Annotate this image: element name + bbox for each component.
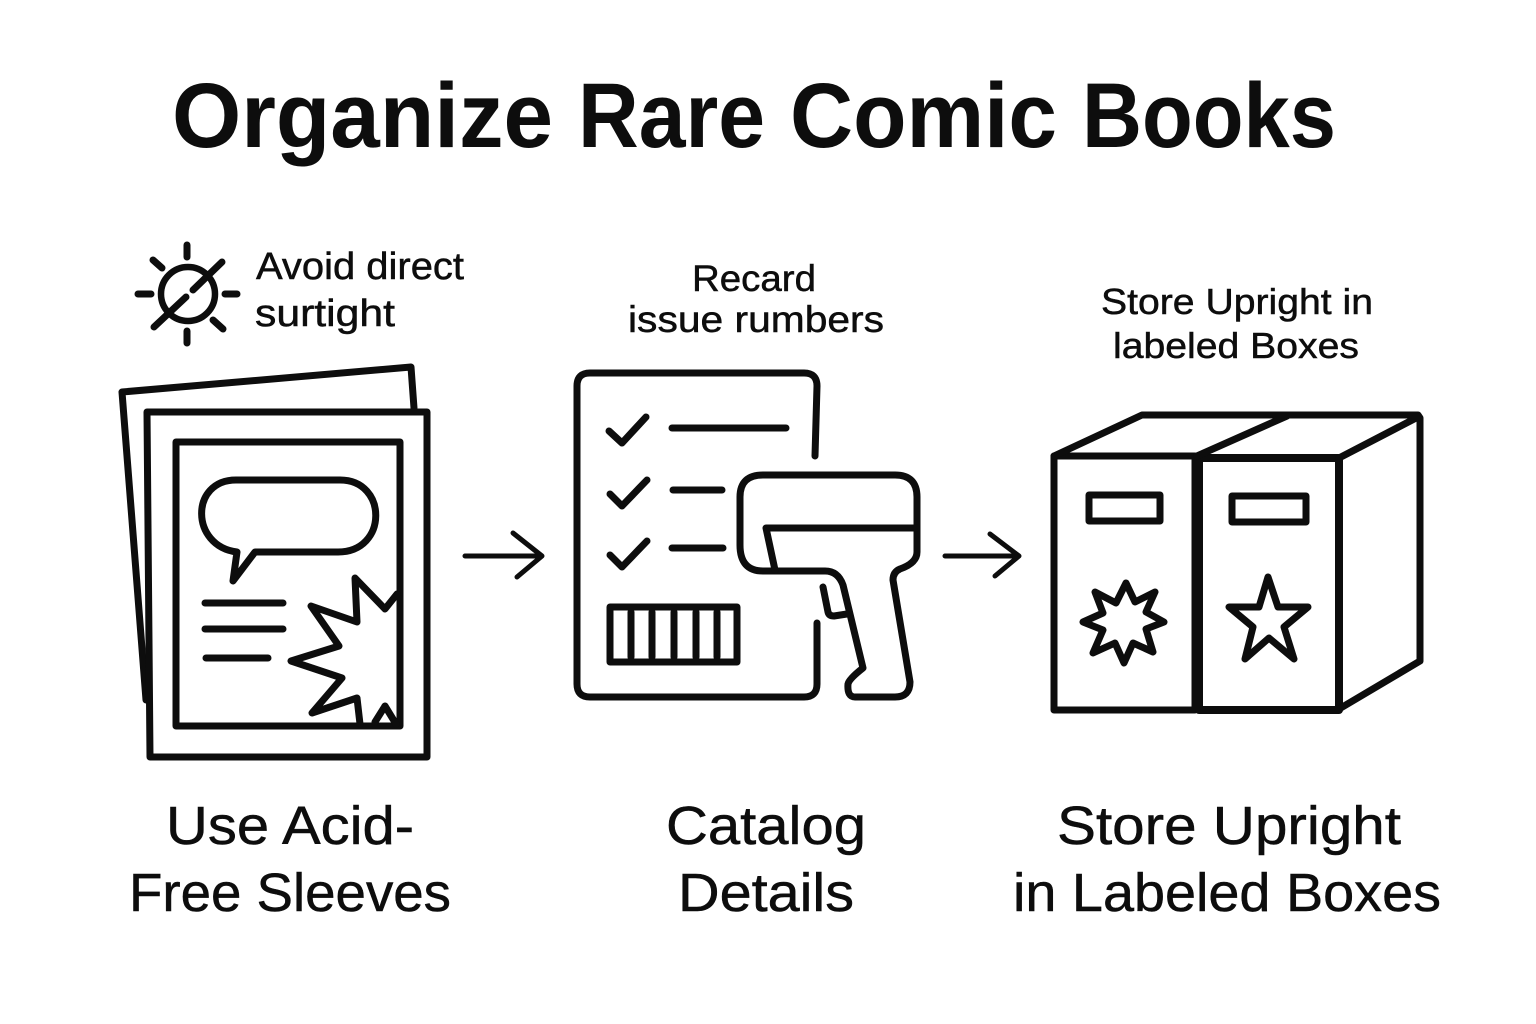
arrow 2 — [945, 534, 1019, 576]
speech bubble — [202, 480, 376, 581]
icon: comic in acid-free sleeves — [122, 367, 427, 757]
title: Comic — [790, 65, 1057, 167]
catalog note: issue rumbers — [628, 299, 884, 340]
label: step 1 — [129, 796, 451, 923]
catalog note — [628, 258, 884, 340]
barcode — [610, 607, 737, 662]
storage note: labeled Boxes — [1113, 325, 1359, 366]
labels — [1089, 495, 1306, 522]
document — [577, 373, 817, 697]
label: step 3 — [1013, 796, 1441, 923]
storage note — [1101, 281, 1373, 366]
sunlight note: Avoid direct — [256, 246, 464, 288]
label: step 2 — [666, 796, 866, 923]
title: Books — [1082, 65, 1336, 167]
label: step 1: Free Sleeves — [129, 863, 451, 923]
icon: crossed-out sun — [138, 245, 237, 343]
title — [172, 65, 1336, 167]
label: step 2: Catalog — [666, 796, 866, 856]
title: Rare — [578, 65, 765, 167]
scanner — [740, 475, 917, 697]
icon: labeled boxes — [1054, 415, 1420, 710]
sunlight note: surtight — [255, 293, 395, 335]
catalog note: Recard — [692, 258, 816, 299]
label: step 3: Store Upright — [1057, 796, 1401, 856]
star badge — [1229, 577, 1308, 659]
label: step 1: Use Acid- — [166, 796, 414, 856]
text lines — [205, 603, 283, 658]
sunlight note — [255, 246, 464, 335]
starburst — [291, 578, 397, 724]
storage note: Store Upright in — [1101, 281, 1373, 322]
label: step 3: in Labeled Boxes — [1013, 863, 1441, 923]
icon: checklist and barcode scanner — [577, 373, 917, 697]
checks and lines — [609, 417, 786, 567]
burst badge — [1083, 583, 1164, 663]
title: Organize — [172, 65, 553, 167]
label: step 2: Details — [678, 863, 854, 923]
arrow 1 — [465, 533, 542, 577]
